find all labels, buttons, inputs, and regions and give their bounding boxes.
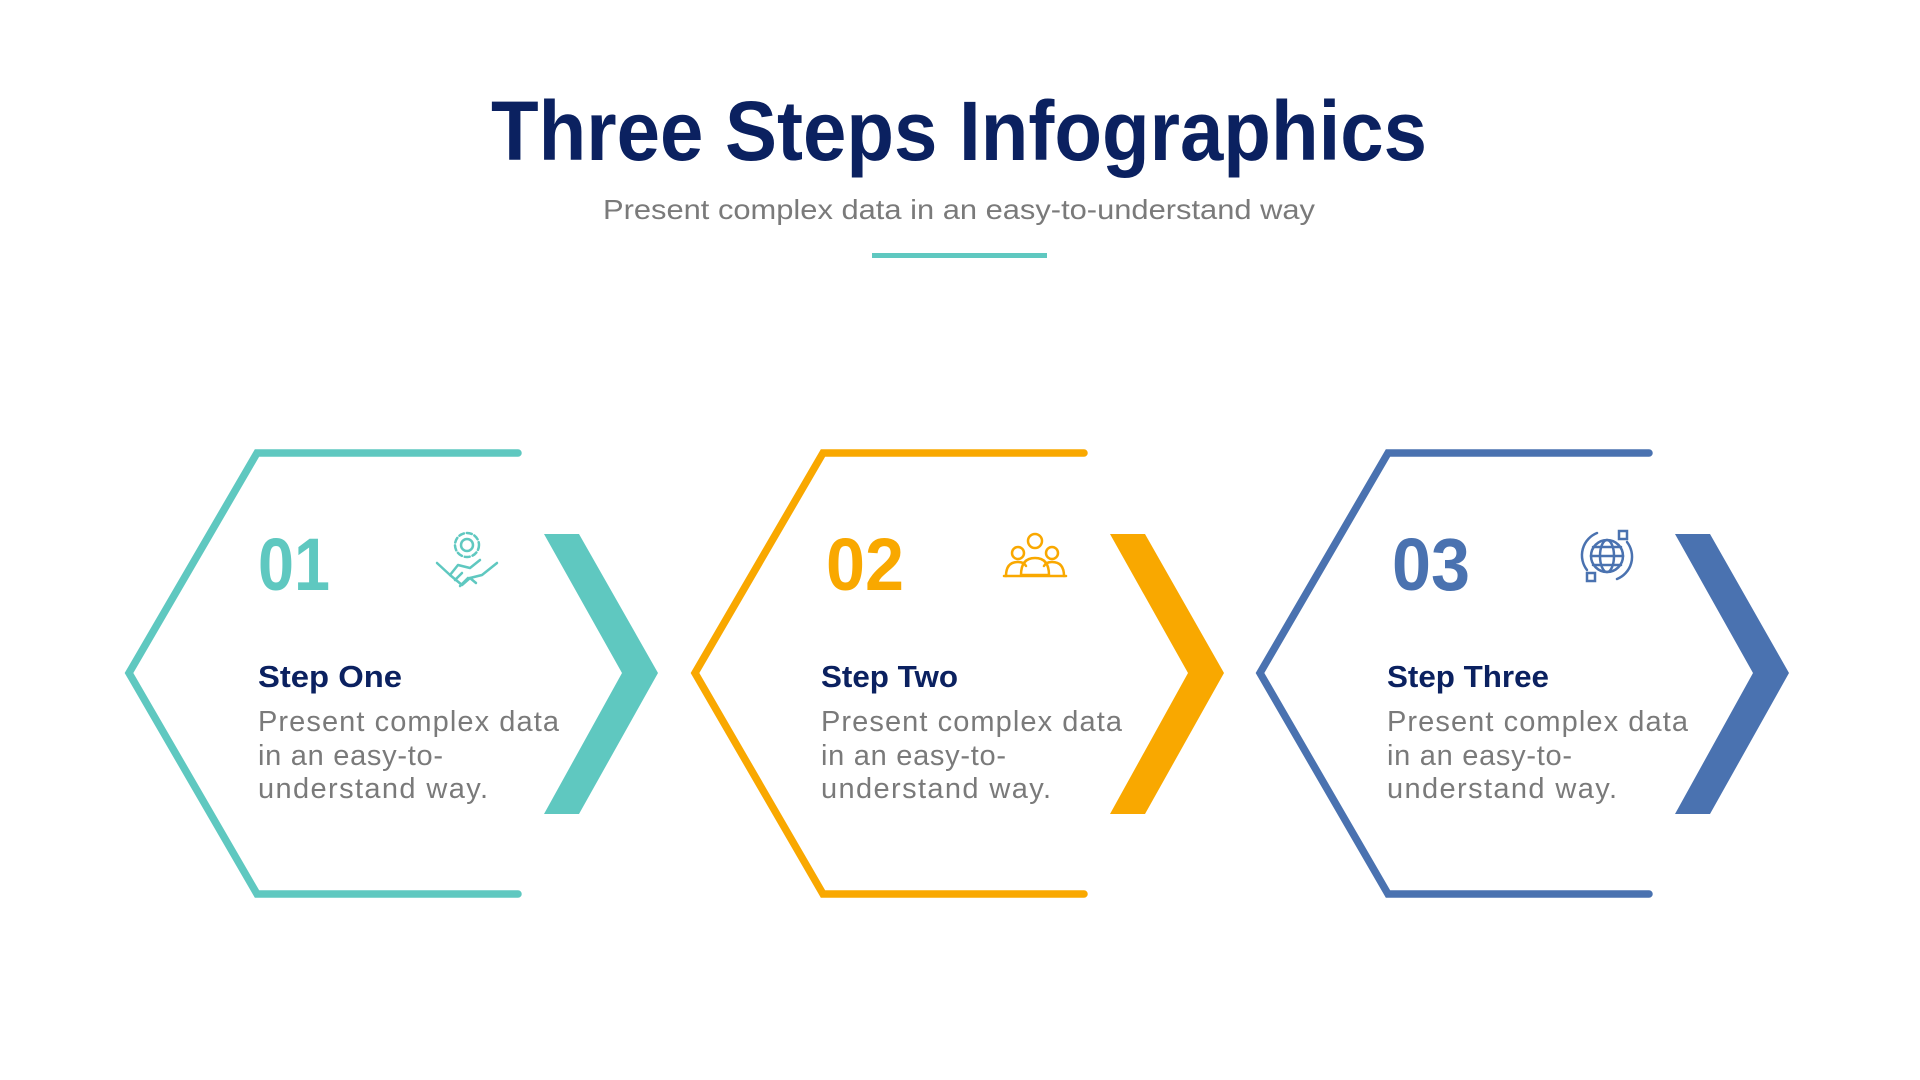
step description: understand way.	[821, 773, 1051, 805]
hexagon outline	[695, 453, 1084, 894]
step description: understand way.	[258, 773, 488, 805]
icon: team	[1004, 534, 1066, 576]
hexagon outline	[1260, 453, 1649, 894]
number: 02	[826, 523, 904, 606]
step description: understand way.	[1387, 773, 1617, 805]
chevron arrow	[1110, 534, 1224, 814]
step description: Present complex data	[821, 706, 1123, 738]
number: 03	[1392, 523, 1470, 606]
panel: step one	[129, 453, 658, 894]
step heading: Step One	[258, 659, 402, 694]
chevron arrow	[1675, 534, 1789, 814]
icon: globe	[1582, 531, 1632, 581]
step heading: Step Two	[821, 659, 958, 694]
chevron arrow	[544, 534, 658, 814]
step description: in an easy-to-	[821, 740, 1006, 772]
step description: in an easy-to-	[258, 740, 443, 772]
subtitle: Present complex data in an easy-to-understand way	[603, 194, 1315, 225]
step description: Present complex data	[1387, 706, 1689, 738]
title underline	[872, 253, 1047, 258]
icon: handshake gear	[437, 533, 497, 586]
step description: Present complex data	[258, 706, 560, 738]
step heading: Step Three	[1387, 659, 1549, 694]
hexagon outline	[129, 453, 518, 894]
number: 01	[258, 523, 330, 606]
title: Three Steps Infographics	[491, 84, 1427, 178]
panel: step three	[1260, 453, 1789, 894]
panel: step two	[695, 453, 1224, 894]
step description: in an easy-to-	[1387, 740, 1572, 772]
